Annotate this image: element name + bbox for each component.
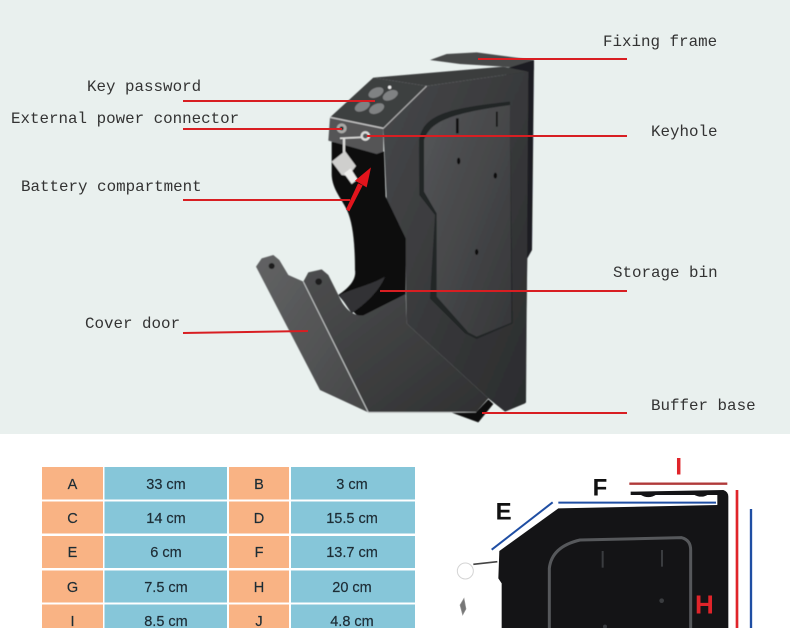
table values: B <box>254 477 264 493</box>
dimension line E <box>492 502 553 550</box>
keypad buttons <box>353 85 400 116</box>
table values: 14 cm <box>146 511 186 527</box>
table values: 3 cm <box>336 477 368 493</box>
table values <box>67 477 378 628</box>
buffer base <box>452 399 493 422</box>
callout: storage bin: Storage bin <box>613 264 718 282</box>
diagram key ring <box>457 562 497 615</box>
callout: fixing frame: Fixing frame <box>603 33 717 51</box>
callout: key password: Key password <box>87 78 201 96</box>
dimension line F <box>558 500 716 506</box>
table values: C <box>67 511 78 527</box>
power connector <box>337 123 347 133</box>
table values: 33 cm <box>146 477 186 493</box>
dimension line H <box>733 490 741 628</box>
cover door front <box>303 269 488 412</box>
table values: D <box>254 511 264 527</box>
table values: H <box>254 580 264 596</box>
cover door left wall <box>256 255 368 412</box>
callout: buffer base: Buffer base <box>651 397 756 415</box>
table values: 15.5 cm <box>326 511 378 527</box>
table values: 20 cm <box>332 580 372 596</box>
product illustration: safe <box>256 52 534 422</box>
dimension line I <box>629 480 727 487</box>
dimensions table <box>42 467 415 628</box>
keyhole and key chain <box>340 132 369 153</box>
callout: external power connector: External power connector <box>11 110 239 128</box>
table values: E <box>68 545 78 561</box>
letter H: H <box>695 590 714 620</box>
table values: A <box>68 477 78 493</box>
panel: product background <box>0 0 790 434</box>
battery arrow <box>346 167 371 211</box>
storage cavity <box>332 142 406 318</box>
storage bin lip <box>339 277 385 313</box>
letter E: E <box>496 499 512 526</box>
dimension diagram <box>457 454 751 628</box>
diagram back panel outline <box>549 538 691 628</box>
back plate <box>487 60 534 412</box>
letter F: F <box>593 475 607 502</box>
table cell backgrounds <box>42 467 415 628</box>
diagram panel holes <box>602 550 664 628</box>
callout: battery compartment: Battery compartment <box>21 178 202 196</box>
callout: keyhole: Keyhole <box>651 123 718 141</box>
table values: 13.7 cm <box>326 545 378 561</box>
recessed back panel <box>419 102 513 339</box>
letter I: I <box>675 454 682 481</box>
fixing frame plate <box>430 52 534 70</box>
front lock plate <box>328 117 383 154</box>
top edge <box>373 67 528 86</box>
table values: G <box>67 580 78 596</box>
callout: cover door: Cover door <box>85 315 180 333</box>
diagram frame feet <box>640 494 708 497</box>
safe body <box>383 72 528 412</box>
table values: 6 cm <box>150 545 182 561</box>
keypad top <box>330 78 427 128</box>
table values: F <box>255 545 264 561</box>
table values: 7.5 cm <box>144 580 188 596</box>
key <box>332 151 358 184</box>
diagram safe body <box>498 490 728 628</box>
dimension line blue right <box>747 509 754 628</box>
